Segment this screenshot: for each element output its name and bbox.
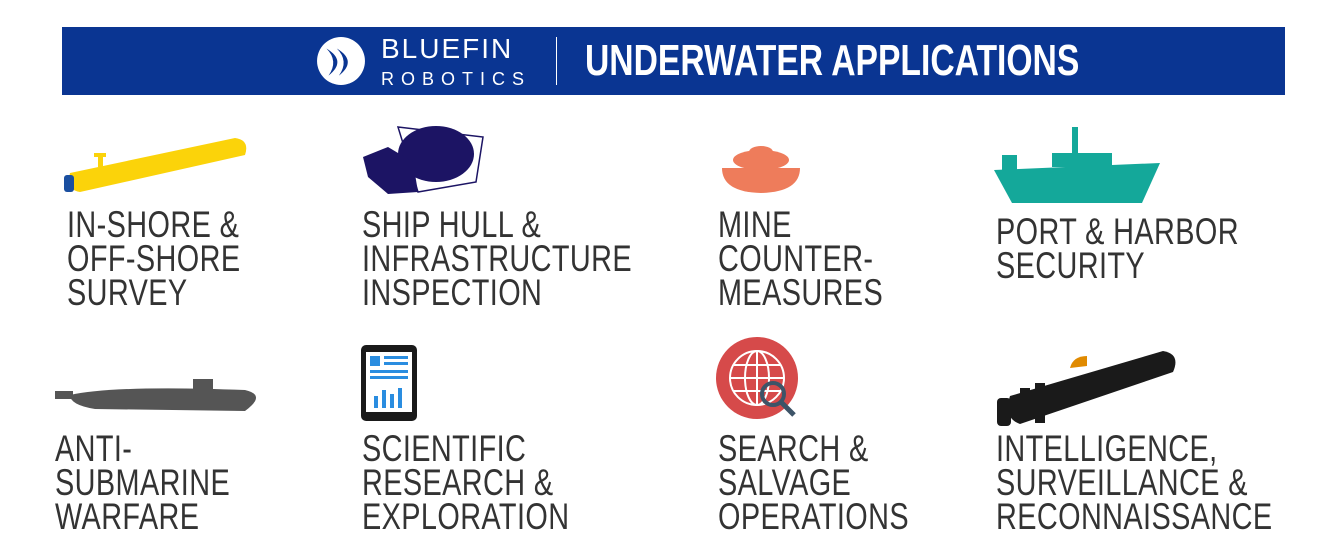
label: search: OPERATIONS [718,496,909,537]
icon: tablet [361,345,417,421]
label: survey: OFF-SHORE [67,238,240,279]
label: anti-submarine: WARFARE [55,496,199,537]
label: anti-submarine [55,428,230,537]
label: port [996,211,1239,286]
label: port: PORT & HARBOR [996,211,1239,252]
label: ISR: RECONNAISSANCE [996,496,1272,537]
label: ship hull: INSPECTION [362,272,542,313]
title: UNDERWATER APPLICATIONS [585,36,1079,85]
icon: ship [994,127,1160,203]
logo text: ROBOTICS [381,69,531,89]
label: ship hull [362,204,632,313]
label: anti-submarine: ANTI- [55,428,132,469]
label: survey: SURVEY [67,272,188,313]
label: survey: IN-SHORE & [67,204,239,245]
label: ship hull: INFRASTRUCTURE [362,238,632,279]
label: search: SEARCH & [718,428,869,469]
label: survey [67,204,240,313]
icon: ROV [363,126,484,194]
label: mine: COUNTER- [718,238,873,279]
label: ISR: INTELLIGENCE, [996,428,1218,469]
label: mine [718,204,883,313]
label: anti-submarine: SUBMARINE [55,462,230,503]
label: search: SALVAGE [718,462,851,503]
label: mine: MEASURES [718,272,883,313]
label: scientific: SCIENTIFIC [362,428,526,469]
label: ISR: SURVEILLANCE & [996,462,1248,503]
label: scientific: EXPLORATION [362,496,569,537]
label: scientific: RESEARCH & [362,462,554,503]
label: search [718,428,909,537]
icon: globe search [716,337,798,419]
label: ship hull: SHIP HULL & [362,204,541,245]
icon: mine [722,146,800,193]
logo icon [317,37,365,85]
icon: black AUV [997,351,1176,426]
label: mine: MINE [718,204,792,245]
logo text [381,33,531,89]
icon: yellow AUV [64,138,246,192]
label: ISR [996,428,1272,537]
icon: submarine [55,379,256,411]
logo text: BLUEFIN [381,33,513,64]
label: port: SECURITY [996,245,1145,286]
label: scientific [362,428,569,537]
header banner [62,27,1285,95]
